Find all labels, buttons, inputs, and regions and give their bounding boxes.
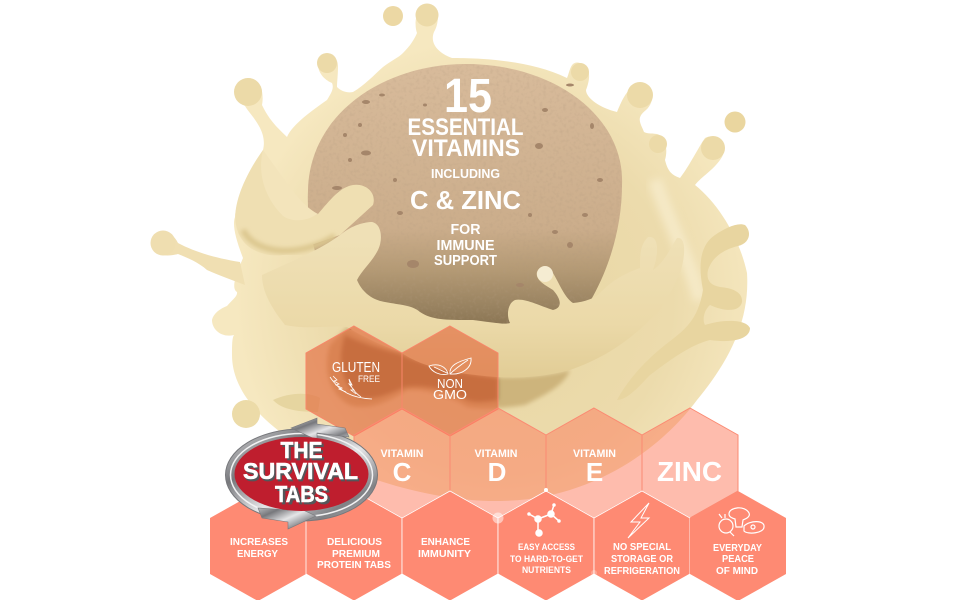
hexagon: no special storage: NO SPECIAL xyxy=(613,542,671,553)
logo wordmark: TABS xyxy=(275,481,328,507)
top hexagon row xyxy=(306,326,498,436)
hexagon: enhance immunity: ENHANCE xyxy=(421,537,470,548)
bottom hexagon row xyxy=(210,491,786,600)
hexagon: vitamin e: VITAMIN xyxy=(573,448,616,460)
headline text over tablet: SUPPORT xyxy=(434,253,497,269)
left drip arm xyxy=(151,232,245,285)
milk drop top xyxy=(383,6,403,26)
logo silver ring xyxy=(226,429,378,521)
hexagon: zinc: ZINC xyxy=(657,456,722,487)
icon: vegetables xyxy=(719,508,764,536)
decorative joint dots xyxy=(492,488,597,576)
hexagon: everyday peace of mind: PEACE xyxy=(722,554,754,565)
milk splash xyxy=(150,4,750,501)
logo wordmark: THE xyxy=(280,437,322,463)
deep shadow beneath wave xyxy=(341,335,498,402)
white wave tip xyxy=(537,266,553,282)
tablet xyxy=(308,64,622,330)
hexagon: delicious premium protein tabs: DELICIOUS xyxy=(327,537,382,548)
front wave xyxy=(262,222,684,377)
logo arrow top xyxy=(291,418,349,440)
hexagon: vitamin e: E xyxy=(586,457,603,487)
left pool blob xyxy=(232,394,320,428)
hexagon: enhance immunity xyxy=(402,491,498,600)
hexagon: gluten free: GLUTEN xyxy=(332,359,380,376)
c and zinc: C & ZINC xyxy=(410,185,521,215)
hexagon: gluten free: FREE xyxy=(358,374,380,385)
hexagon: vitamin d: VITAMIN xyxy=(474,448,518,460)
hexagon: non gmo: NON xyxy=(437,376,463,391)
hexagon: zinc xyxy=(642,408,738,518)
logo wordmark: SURVIVAL xyxy=(243,458,358,484)
logo wordmark: THE xyxy=(282,439,324,465)
middle hexagon row xyxy=(354,408,738,518)
left swirl xyxy=(235,150,374,256)
tablet grain xyxy=(378,66,594,322)
logo wordmark xyxy=(243,437,360,509)
for immune support: FOR xyxy=(450,222,481,238)
number 15: 15 xyxy=(444,70,492,123)
logo red oval xyxy=(234,437,368,511)
logo wordmark: SURVIVAL xyxy=(244,460,360,486)
hexagon: no special storage: STORAGE OR xyxy=(611,554,674,565)
including: INCLUDING xyxy=(431,166,500,181)
hexagon: easy access: TO HARD-TO-GET xyxy=(510,554,583,564)
icon: molecule xyxy=(528,504,560,536)
hexagon: no special storage: REFRIGERATION xyxy=(604,566,680,577)
headline text over tablet: VITAMINS xyxy=(412,135,520,162)
right column shading xyxy=(655,180,700,300)
milk drop right xyxy=(724,112,746,132)
hexagon: vitamin c xyxy=(354,408,450,518)
hexagon: increases energy xyxy=(210,491,306,600)
hexagon: vitamin d xyxy=(450,408,546,518)
milk crown and pool xyxy=(212,4,747,501)
hexagon: enhance immunity: IMMUNITY xyxy=(418,549,471,560)
hexagon: easy access: NUTRIENTS xyxy=(522,565,571,575)
hexagon: no special storage xyxy=(594,491,690,600)
headline text over tablet xyxy=(408,70,524,269)
left swirl inner pocket xyxy=(261,150,318,220)
milk arm tips xyxy=(234,4,725,160)
hexagon: everyday peace of mind: EVERYDAY xyxy=(713,543,762,554)
hexagon: non gmo: GMO xyxy=(433,387,467,402)
icon: lightning bolt xyxy=(628,503,649,538)
hexagon: increases energy: ENERGY xyxy=(237,549,278,560)
hexagon: vitamin c: VITAMIN xyxy=(380,448,424,460)
hexagon: easy access: EASY ACCESS xyxy=(518,542,575,552)
logo wordmark: TABS xyxy=(278,483,330,509)
right arms xyxy=(617,224,750,400)
hexagon: increases energy: INCREASES xyxy=(230,537,288,548)
hexagon: delicious premium protein tabs: PREMIUM xyxy=(332,549,380,560)
infographic canvas xyxy=(150,4,786,600)
essential vitamins: ESSENTIAL xyxy=(408,114,524,141)
tablet speckles xyxy=(332,84,603,287)
left drip tip xyxy=(150,230,176,256)
logo: the survival tabs xyxy=(226,418,378,529)
hexagon: vitamin e xyxy=(546,408,642,518)
hexagon: non gmo xyxy=(402,326,498,436)
left swirl fold shading xyxy=(243,230,335,251)
headline text over tablet: IMMUNE xyxy=(436,238,495,254)
icon: wheat xyxy=(330,376,372,399)
hexagon: vitamin c: C xyxy=(393,457,412,487)
hexagon: gluten free xyxy=(306,326,402,436)
hexagon: delicious premium protein tabs: PROTEIN TABS xyxy=(317,560,391,571)
icon: leaves xyxy=(429,358,471,375)
hexagon: everyday peace of mind xyxy=(690,491,786,600)
hexagon: everyday peace of mind: OF MIND xyxy=(716,566,758,577)
shadow beneath wave xyxy=(327,327,570,408)
hexagon: delicious premium protein tabs xyxy=(306,491,402,600)
hexagon: easy access xyxy=(498,491,594,600)
hexagon: vitamin d: D xyxy=(488,457,506,487)
logo arrow bottom xyxy=(258,503,316,529)
